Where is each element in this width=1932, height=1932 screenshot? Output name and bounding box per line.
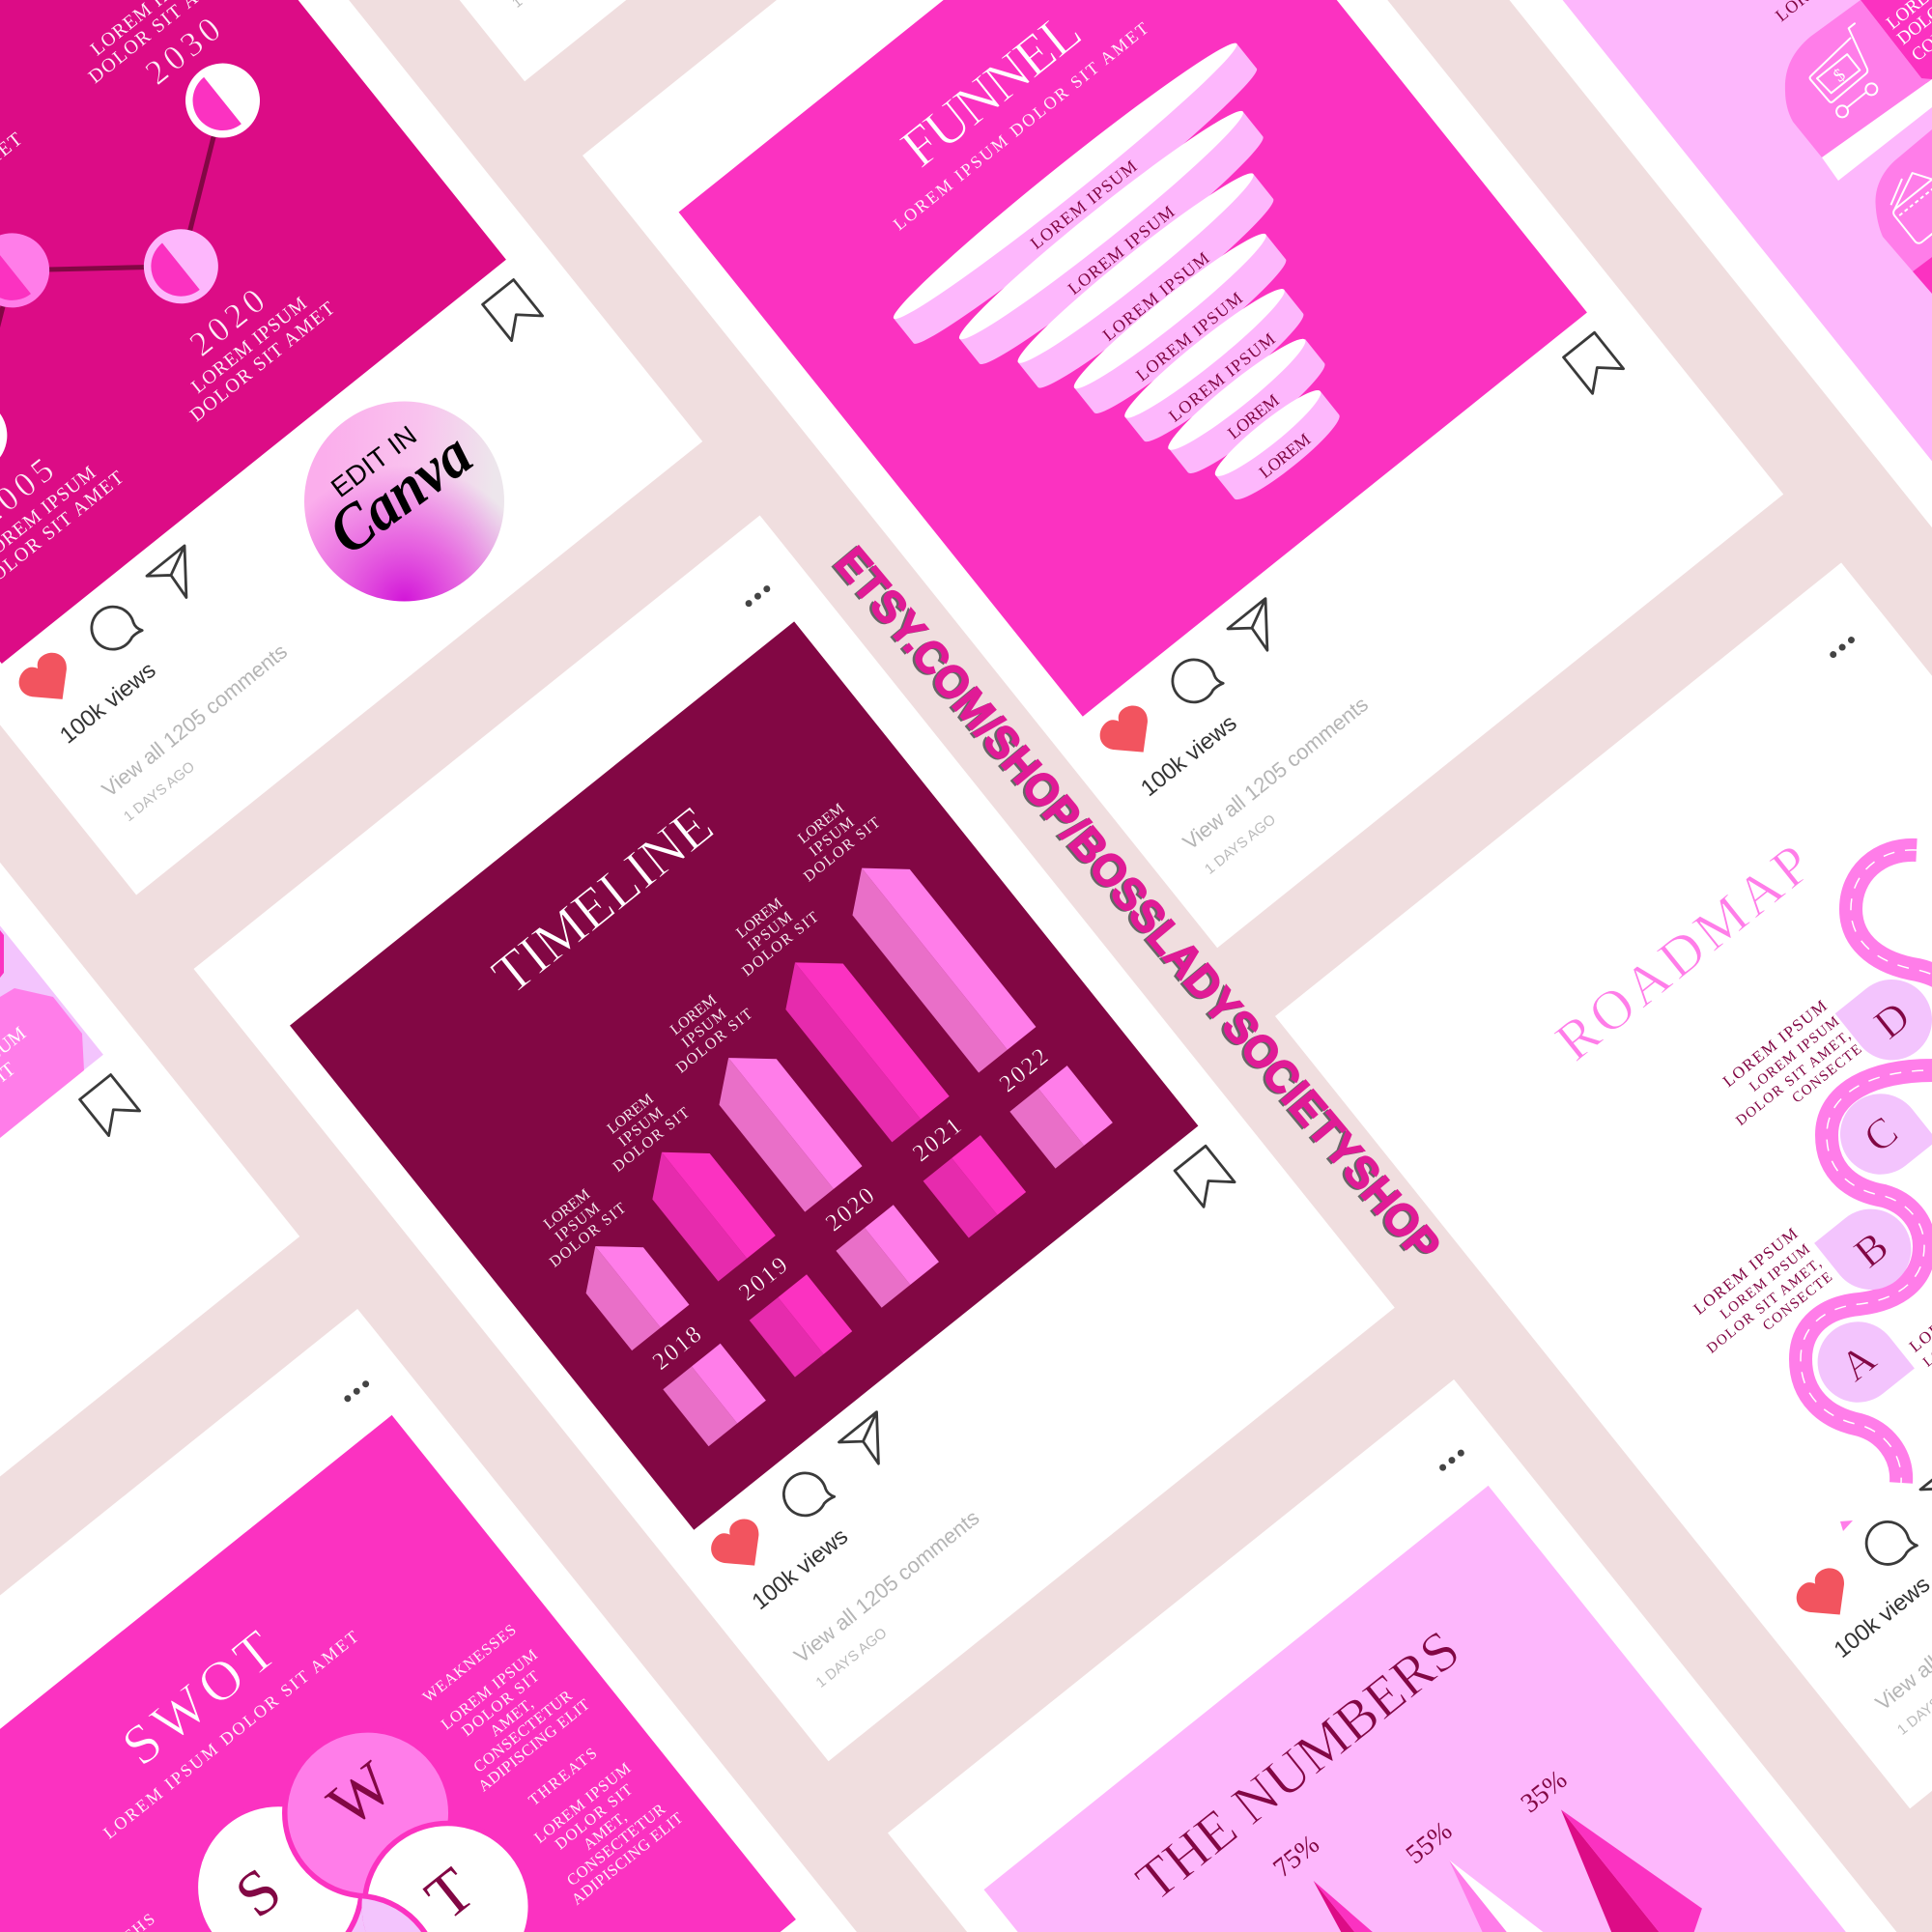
note 2018 [526, 1174, 630, 1271]
text block B: CONSECTE [1760, 1269, 1835, 1334]
comments text: View all 1205 comments [98, 639, 292, 802]
note 2018: LOREM [541, 1186, 593, 1233]
card: timeline [193, 515, 1395, 1761]
percent labels: 35% [1516, 1765, 1573, 1819]
marker C: C [1855, 1107, 1907, 1162]
spike 55 [1411, 1830, 1629, 1932]
connecting line [0, 100, 287, 436]
days ago text: 1 DAYS AGO [121, 758, 198, 825]
threats block: CONSECTETUR [563, 1800, 668, 1889]
icon: bookmark [80, 1075, 140, 1136]
funnel disc 1: LOREM IPSUM [1027, 156, 1141, 253]
days ago text: 1 DAYS AGO [812, 1625, 891, 1691]
year labels: 2019 [734, 1252, 793, 1306]
tile 2 [1875, 129, 1932, 271]
icon: comment [1164, 651, 1224, 711]
text block D: LOREM IPSUM [1719, 997, 1831, 1091]
venn letters [214, 1747, 504, 1932]
white strip [1822, 79, 1932, 181]
hot pink strip 1 [1861, 0, 1932, 89]
percent labels [1267, 1683, 1573, 1932]
shape: pink octagon [0, 988, 84, 1138]
panel: lilac background [0, 551, 103, 1459]
funnel disc 3 [1009, 162, 1282, 399]
funnel disc 6: LOREM [1224, 390, 1283, 442]
hot pink strip 2 [1913, 257, 1932, 294]
icon: bookmark [1564, 332, 1624, 393]
venn letters: W [315, 1747, 407, 1841]
year labels: 2020 [821, 1182, 879, 1236]
text block B [1679, 1224, 1835, 1371]
column 2021 [766, 940, 950, 1142]
tile 1 [1785, 0, 1932, 157]
label 2020: LOREM IPSUM [187, 293, 311, 398]
block 2020 [836, 1205, 939, 1308]
funnel disc 4 [1065, 224, 1294, 423]
threats block [502, 1727, 686, 1909]
year labels: 2021 [908, 1113, 967, 1167]
node 2010 [0, 218, 65, 323]
icon: bookmark [1175, 1146, 1235, 1207]
views text: 100k views [747, 1523, 853, 1615]
funnel disc 4: LOREM IPSUM [1132, 288, 1246, 384]
venn circles [198, 1733, 528, 1932]
spike 35 [1523, 1779, 1721, 1932]
icon: comment [1858, 1513, 1918, 1573]
weaknesses block: AMET, [486, 1694, 537, 1740]
card: roadmap [1275, 562, 1932, 1808]
threats block: THREATS [525, 1744, 600, 1809]
text block B: LOREM IPSUM [1690, 1224, 1801, 1319]
icon: comment [775, 1464, 835, 1524]
subtitle: LOREM IPSUM DOLOR SIT AMET [890, 18, 1151, 234]
menu dots [343, 1379, 371, 1404]
text block D: LOREM IPSUM [1747, 1014, 1842, 1094]
column 2020 [699, 1035, 863, 1212]
card: left middle [0, 444, 299, 1690]
note 2020: DOLOR SIT [673, 1006, 756, 1076]
funnel disc 7 [1208, 383, 1347, 507]
card: the numbers [888, 1379, 1932, 1932]
sticker: edit in canva: Canva [316, 418, 485, 568]
label 2020 [148, 249, 339, 426]
spike 75 [1276, 1851, 1536, 1932]
marker B: B [1845, 1222, 1897, 1277]
marker B [1814, 1193, 1927, 1306]
weaknesses block [410, 1613, 593, 1795]
icon: heart [13, 646, 83, 716]
panel: the numbers [955, 1448, 1894, 1932]
views text: 100k views [1830, 1572, 1932, 1663]
marker D [1835, 963, 1932, 1076]
funnel disc 5 [1117, 279, 1311, 451]
title: SWOT [110, 1618, 288, 1777]
icon: heart [705, 1513, 776, 1582]
funnel disc 7: LOREM [1255, 430, 1314, 482]
year labels: 2022 [995, 1043, 1053, 1097]
block 2019 [750, 1274, 852, 1378]
note 2019: LOREM [605, 1091, 657, 1137]
weaknesses block: LOREM IPSUM [438, 1645, 541, 1733]
note 2018: IPSUM [553, 1200, 603, 1245]
card: right column [1449, 0, 1932, 717]
column 2022 [833, 845, 1036, 1073]
label 2005 [0, 418, 128, 595]
text block D [1708, 997, 1864, 1143]
icon: send [1920, 1460, 1932, 1521]
block 2018 [663, 1344, 766, 1446]
marker D: D [1865, 992, 1918, 1048]
weaknesses block: CONSECTETUR [469, 1687, 576, 1776]
views text: 100k views [1136, 710, 1242, 802]
marker A [1802, 1305, 1915, 1419]
threats block: ADIPISCING ELIT [568, 1808, 686, 1909]
threats block: DOLOR SIT [552, 1780, 636, 1853]
icon: heart [1790, 1562, 1861, 1632]
title: THE NUMBERS [1124, 1617, 1471, 1913]
note 2020 [652, 980, 756, 1076]
block 2022 [1009, 1065, 1113, 1169]
panel: funnel [677, 0, 1717, 879]
panel: light pink [1547, 0, 1932, 485]
panel: roadmap text [1346, 636, 1932, 1739]
year labels [648, 1043, 1053, 1376]
title: ROADMAP [1544, 832, 1823, 1073]
note 2021: DOLOR SIT [739, 909, 822, 980]
marker C [1824, 1077, 1932, 1191]
note 2022: LOREM [795, 801, 847, 847]
funnel disc 2 [950, 99, 1272, 376]
label 2030 [72, 0, 265, 122]
menu dots [744, 584, 772, 609]
weaknesses block: DOLOR SIT [458, 1666, 543, 1740]
icon: send [838, 1412, 902, 1474]
funnel disc 5: LOREM IPSUM [1165, 329, 1279, 426]
card: swot [0, 1309, 857, 1932]
threats block: LOREM IPSUM [530, 1758, 635, 1847]
note 2019: DOLOR SIT [611, 1104, 693, 1176]
note 2021: IPSUM [745, 909, 796, 954]
icon: cart: $ [1830, 65, 1850, 87]
node 2020 [128, 214, 233, 319]
menu dots [1438, 1448, 1465, 1472]
note 2019 [589, 1078, 693, 1176]
block 2021 [923, 1135, 1026, 1238]
funnel disc 1 [884, 32, 1266, 355]
venn letters: T [412, 1855, 487, 1932]
marker A: A [1832, 1334, 1886, 1390]
node 2030 [170, 48, 275, 153]
icon: send [147, 546, 211, 609]
funnel disc 2: LOREM IPSUM [1065, 202, 1179, 298]
shape: hot pink fragment [0, 930, 4, 978]
text block D: DOLOR SIT AMET, [1733, 1028, 1854, 1129]
text block D: CONSECTE [1789, 1041, 1864, 1106]
note 2019: IPSUM [615, 1104, 667, 1150]
percent labels: 75% [1267, 1830, 1325, 1884]
note 2021: LOREM [733, 895, 786, 942]
icon: bookmark [483, 280, 543, 341]
comments text: View all 1205 comments [789, 1505, 984, 1668]
icon: wallet [1880, 159, 1932, 245]
label 2020: 2020 [183, 281, 271, 363]
funnel disc 3: LOREM IPSUM [1099, 248, 1212, 345]
note 2018: DOLOR SIT [547, 1200, 630, 1271]
icon: send [1228, 599, 1292, 661]
card: funnel [582, 0, 1783, 948]
note 2022: DOLOR SIT [801, 814, 884, 885]
panel: growth chart [0, 0, 636, 826]
year labels: 2018 [648, 1321, 706, 1376]
weaknesses block: ADIPISCING ELIT [474, 1695, 593, 1795]
title: FUNNEL [889, 0, 1093, 180]
comments text: View all 1205 comments [1179, 692, 1373, 855]
weaknesses block: WEAKNESSES [419, 1620, 520, 1706]
views text: 100k views [55, 657, 161, 749]
menu dots [1829, 636, 1856, 659]
card: growth [0, 0, 702, 895]
note 2022 [780, 788, 884, 885]
right panel text: light [1883, 0, 1932, 66]
label 2030: 2030 [138, 10, 228, 92]
days ago text: 1 DAYS AGO [1202, 811, 1279, 878]
shop url: ETSY.COM/SHOP/BOSSLADYSOCIETYSHOP [823, 538, 1448, 1271]
subtitle: LOREM IPSUM DOLOR SIT AMET [99, 1627, 362, 1842]
shop url: ETSY.COM/SHOP/BOSSLADYSOCIETYSHOP [825, 537, 1451, 1271]
funnel disc 6 [1161, 329, 1332, 483]
label 2020: DOLOR SIT AMET [186, 298, 339, 426]
node 2005 [0, 384, 22, 488]
icon: comment [83, 598, 143, 658]
text block A [1906, 1262, 1932, 1371]
note 2020: IPSUM [679, 1006, 729, 1051]
column 2019 [633, 1129, 776, 1282]
panel: swot [0, 1379, 798, 1932]
panel: timeline [260, 584, 1329, 1692]
sticker: edit in canva: EDIT IN [326, 420, 422, 503]
venn letters: S [222, 1854, 295, 1931]
title: TIMELINE [480, 793, 724, 1007]
note 2022: IPSUM [807, 814, 858, 860]
percent labels: 55% [1401, 1816, 1458, 1870]
icon: cart [1800, 23, 1897, 121]
road [1801, 850, 1932, 1483]
text block B: LOREM IPSUM [1718, 1241, 1813, 1322]
text block B: DOLOR SIT AMET, [1704, 1256, 1825, 1356]
column 2018 [567, 1223, 689, 1350]
road fragment [1840, 1520, 1853, 1531]
note 2021 [719, 883, 822, 980]
threats block: AMET, [580, 1807, 630, 1854]
icon: heart [1094, 699, 1164, 769]
note 2020: LOREM [668, 992, 720, 1038]
